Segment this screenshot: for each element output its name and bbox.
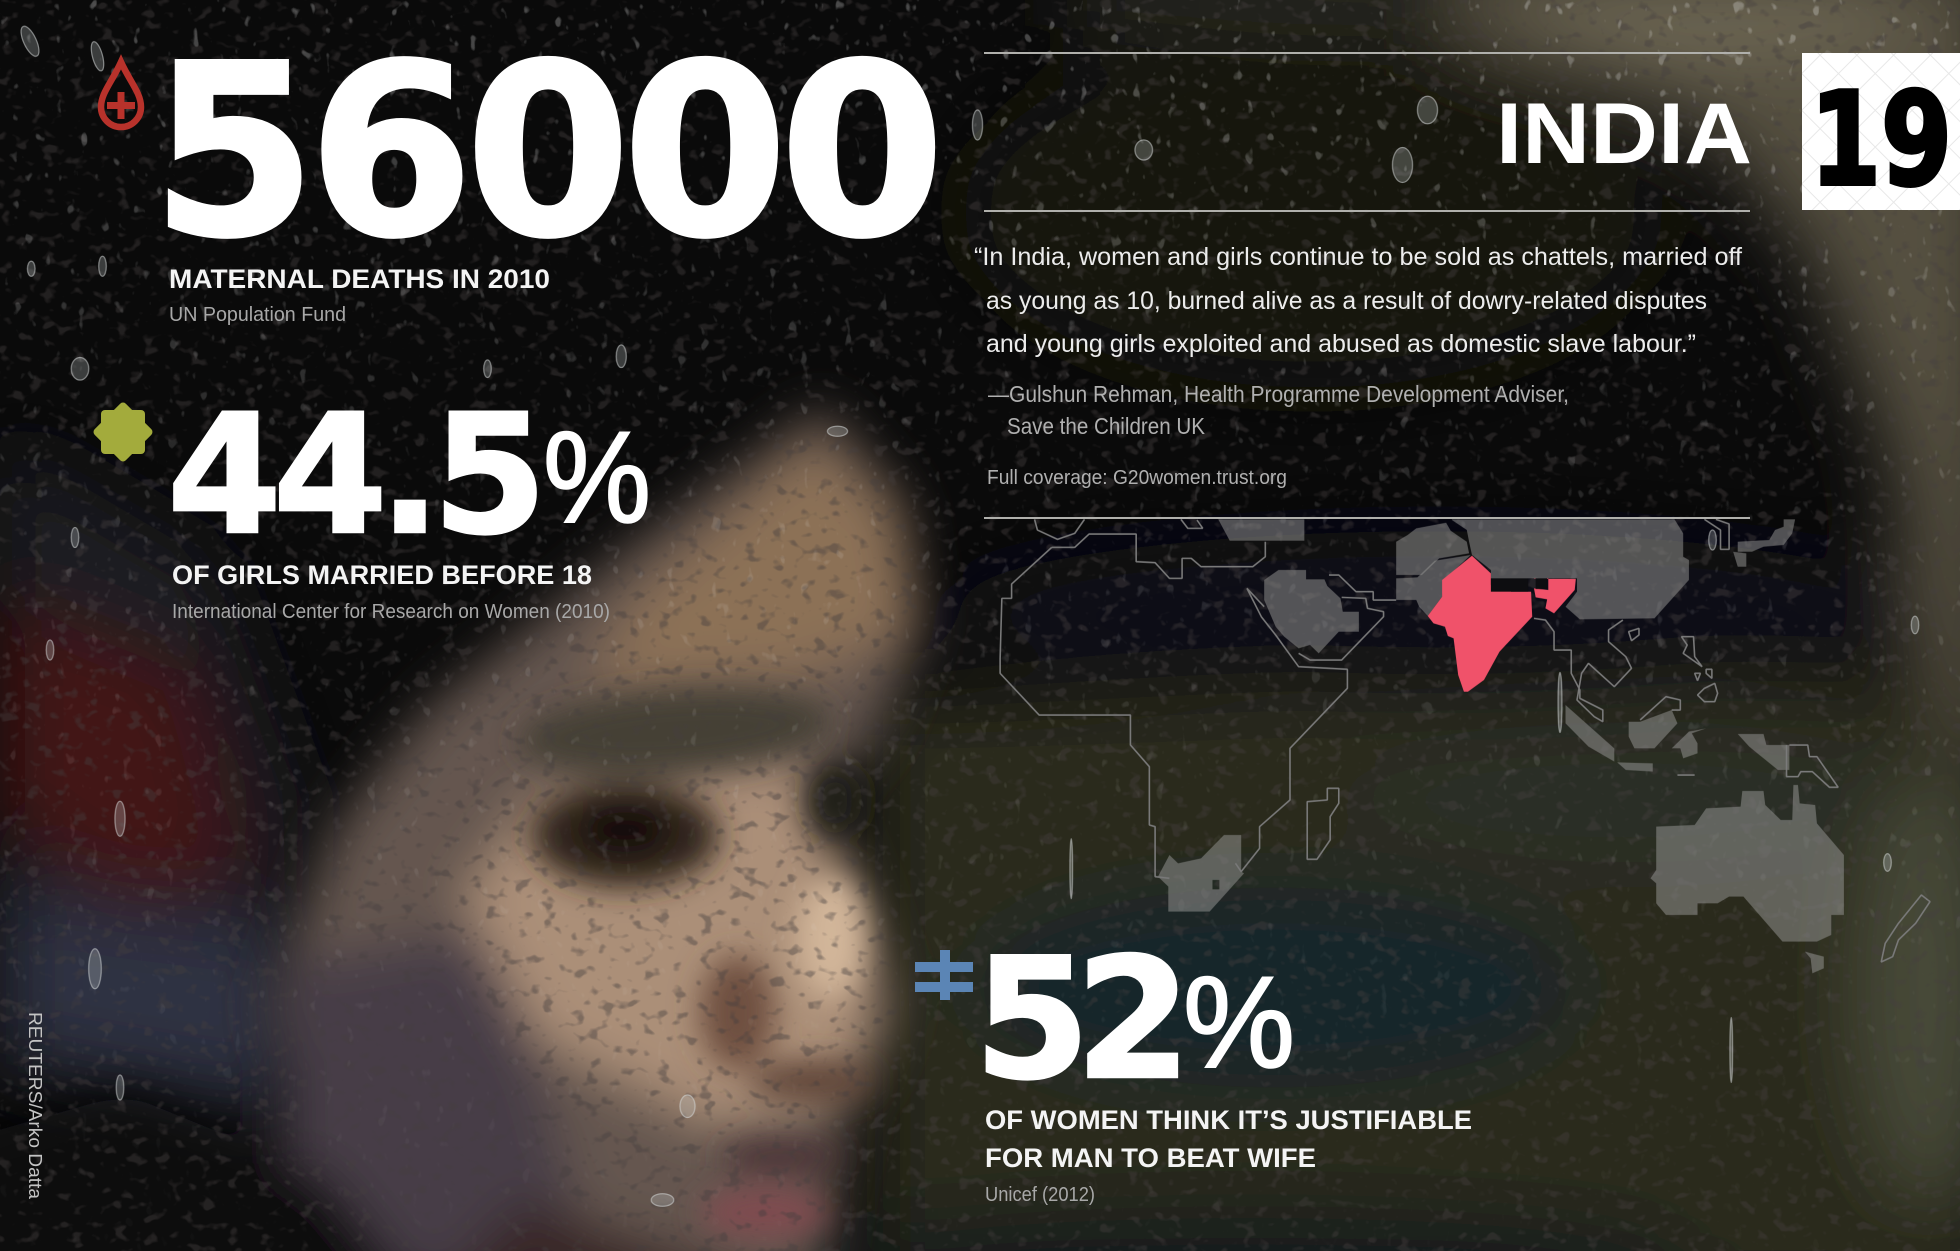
source: Unicef: Unicef (2012)	[985, 1184, 1095, 1206]
attribution: Save the Children UK	[1007, 413, 1206, 439]
quote	[974, 243, 1742, 358]
heading: India: INDIA	[1496, 86, 1752, 182]
label: maternal deaths: MATERNAL DEATHS IN 2010	[169, 264, 550, 294]
map: shaded countries	[1158, 519, 1844, 973]
quote: “In India, women and girls continue to be sold as chattels, married off	[974, 243, 1742, 271]
icon: olive eight-point star	[92, 401, 154, 463]
stat: 44.5%: %	[543, 404, 651, 550]
label: women think it's justifiable	[985, 1105, 1472, 1173]
icon: blue not-equal sign	[915, 950, 973, 1000]
quote: as young as 10, burned alive as a result of dowry-related disputes	[986, 287, 1707, 315]
stat: 52%	[974, 923, 1295, 1117]
label: women think it's justifiable: FOR MAN TO BEAT WIFE	[985, 1143, 1316, 1173]
attribution: —Gulshun Rehman, Health Programme Development Adviser,	[988, 381, 1569, 407]
source: UN Population Fund: UN Population Fund	[169, 304, 346, 326]
label: women think it's justifiable: OF WOMEN THINK IT’S JUSTIFIABLE	[985, 1105, 1472, 1135]
stat: 44.5%: 44.5	[167, 379, 538, 571]
map: India highlighted	[1428, 556, 1576, 692]
icon: blood drop with cross	[101, 62, 141, 127]
divider rules	[984, 53, 1750, 518]
source: International Center for Research on Women: International Center for Research on Women (2010)	[172, 601, 610, 623]
photo credit: REUTERS/Arko Datta	[25, 1012, 45, 1200]
stat: 52%: 52	[974, 923, 1177, 1117]
stat: 52%: %	[1183, 949, 1295, 1095]
full coverage link text: Full coverage: G20women.trust.org	[987, 467, 1287, 489]
quote: and young girls exploited and abused as domestic slave labour.”	[986, 330, 1696, 358]
attribution	[988, 381, 1569, 439]
map: coastline outlines	[1000, 519, 1930, 962]
map of Africa, Asia and Australia	[1000, 519, 1930, 973]
stat: 56000: 56000	[151, 14, 937, 291]
label: girls married before 18: OF GIRLS MARRIED BEFORE 18	[172, 560, 592, 590]
